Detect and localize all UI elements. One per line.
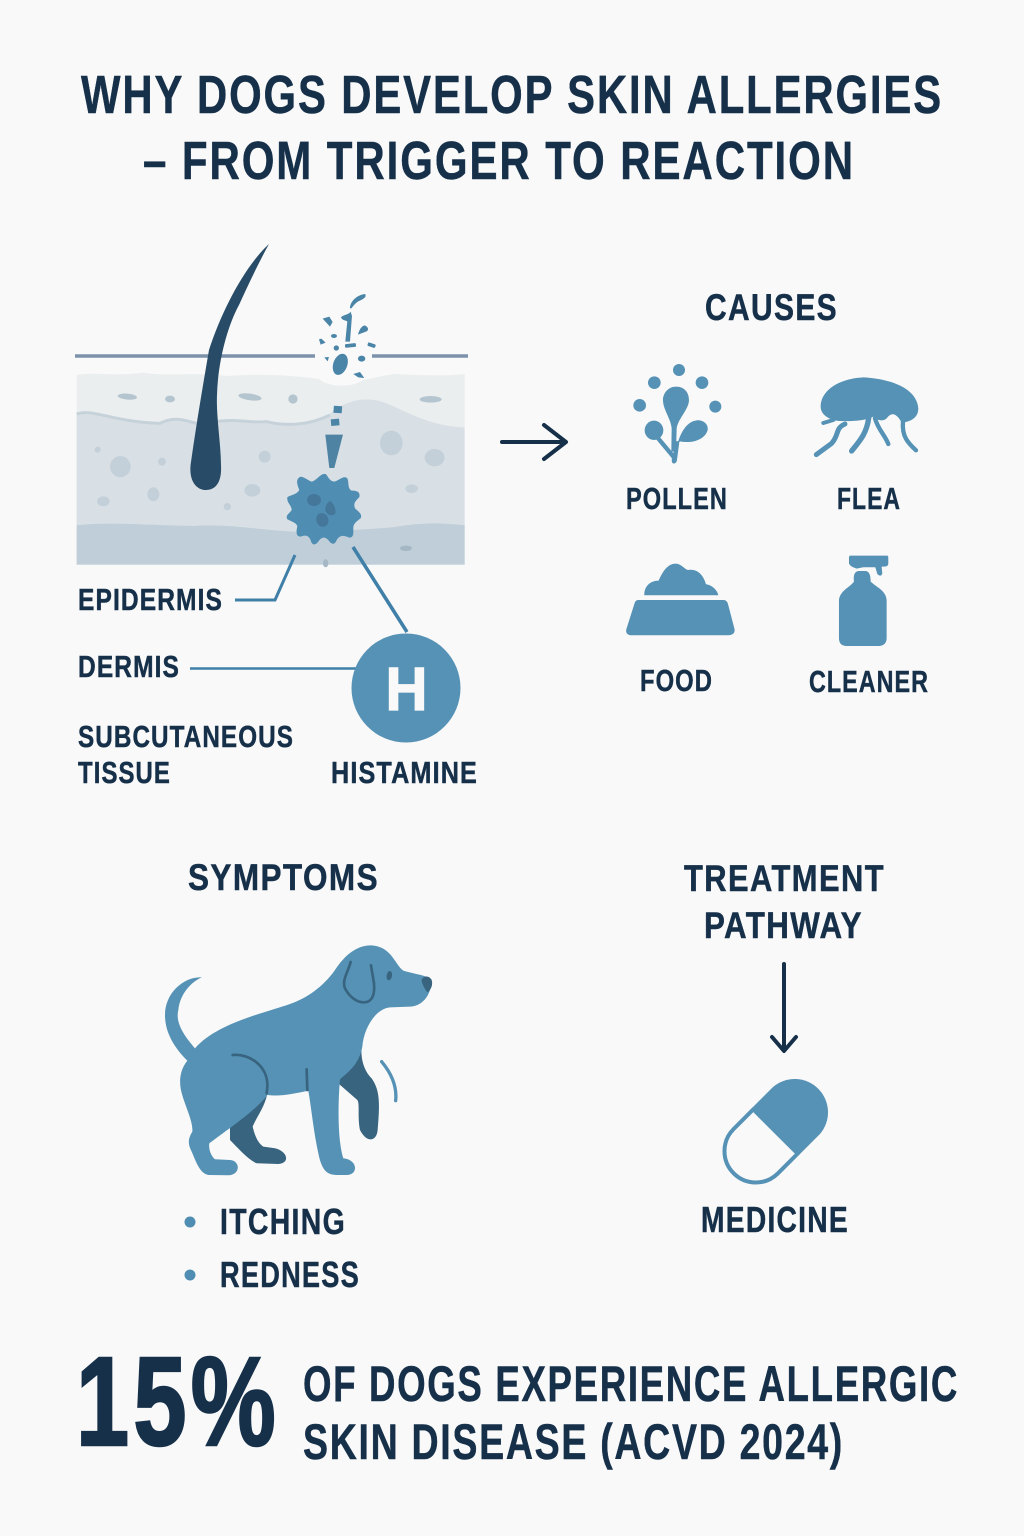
skin layers [77,364,465,567]
statistic description [303,1356,959,1470]
label: pollen: POLLEN [626,481,728,516]
symptom: redness: REDNESS [220,1254,360,1295]
title [81,65,943,191]
big number: 15% [76,1331,280,1472]
icon: scratching dog [165,945,432,1175]
heading: treatment pathway: PATHWAY [704,905,863,946]
immune mast cell [287,474,361,544]
skin surface line [75,354,468,358]
arrow: skin to causes [502,425,566,459]
heading: causes: CAUSES [705,287,838,328]
label: cleaner: CLEANER [809,664,929,699]
label: subcutaneous tissue: SUBCUTANEOUS [78,719,294,754]
symptom: itching: ITCHING [220,1201,346,1242]
label: subcutaneous tissue [78,719,294,790]
label: flea: FLEA [837,481,901,516]
hair follicle [190,244,269,490]
symptom: redness [184,1254,360,1295]
arrow: down to medicine [772,964,796,1051]
icon: spray bottle [839,556,888,646]
panel: treatment pathway [684,858,885,1240]
statistic description: SKIN DISEASE (ACVD 2024) [303,1414,844,1470]
icon: histamine circle [352,634,460,742]
label: subcutaneous tissue: TISSUE [78,755,171,790]
label: epidermis with leader: EPIDERMIS [78,582,223,617]
heading: treatment pathway: TREATMENT [684,858,885,899]
icon: food bowl [626,564,735,635]
panel: statistic [76,1331,959,1472]
icon: pollen [633,364,721,461]
heading: symptoms: SYMPTOMS [188,857,379,898]
icon: flea [816,377,918,455]
panel: skin cross-section diagram [75,244,478,790]
histamine leader [353,547,407,632]
label: epidermis with leader [78,555,295,617]
label: food: FOOD [640,663,713,698]
panel: causes [626,287,929,699]
symptom: itching [184,1201,346,1242]
panel: symptoms [165,857,432,1295]
heading: treatment pathway [684,858,885,946]
icon: medicine capsule [724,1079,828,1182]
allergen particles [319,294,376,468]
icon: histamine circle: H [386,655,428,723]
label: dermis with leader: DERMIS [78,649,180,684]
label: histamine: HISTAMINE [331,755,478,790]
label: medicine: MEDICINE [701,1199,849,1240]
